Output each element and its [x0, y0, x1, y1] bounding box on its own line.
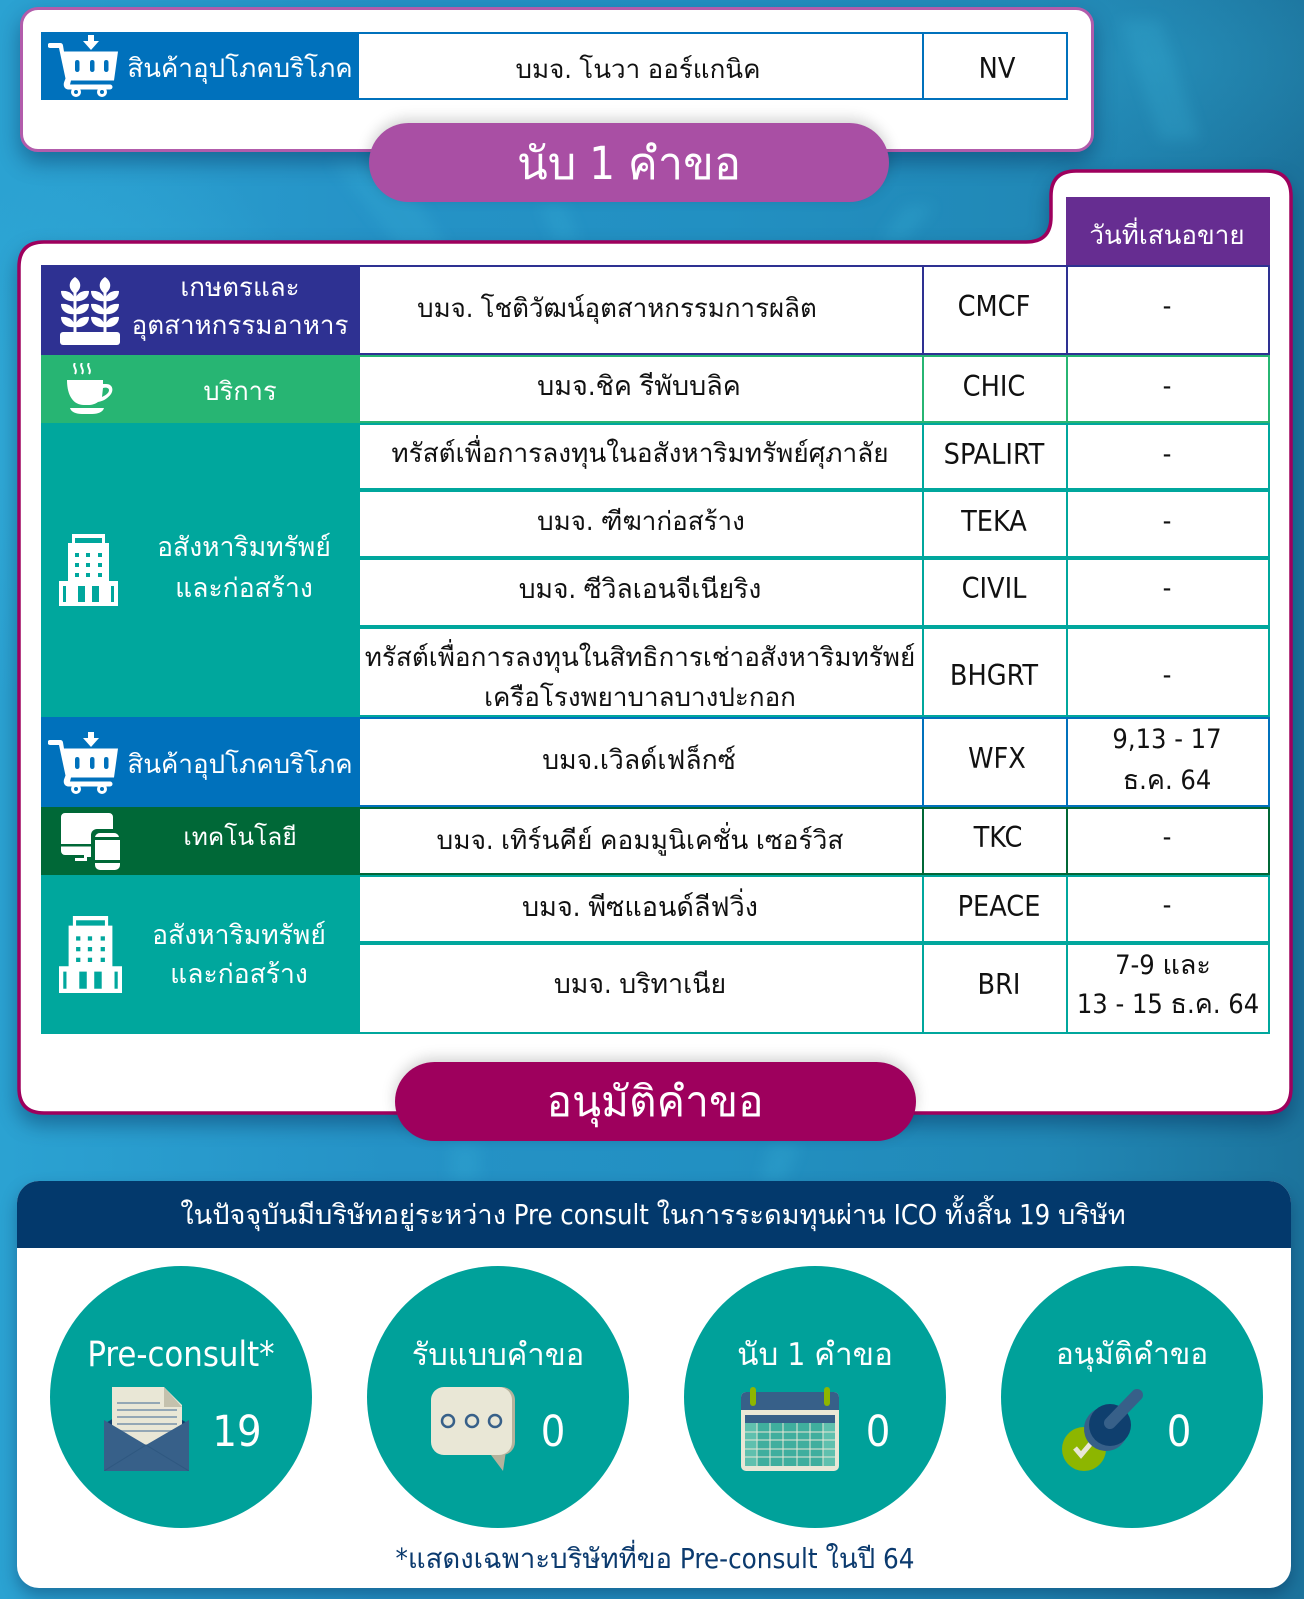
label: property and construction: [157, 532, 331, 604]
label: property and construction: [152, 920, 326, 990]
header text: วันที่เสนอขาย: [1089, 221, 1245, 251]
offering dates: [1077, 291, 1259, 1020]
tickers: WFX: [968, 742, 1026, 775]
icon: stamp: [1062, 1389, 1143, 1471]
circle: approved: อนุมัติคำขอ: [1056, 1337, 1208, 1372]
label: technology: เทคโนโลยี: [183, 822, 297, 851]
icon: speech bubble: [431, 1387, 515, 1471]
row: BHGRT: [41, 627, 1270, 717]
companies: บมจ. โชติวัฒน์อุตสาหกรรมการผลิต: [417, 294, 817, 324]
label: agriculture and food: [132, 273, 348, 341]
offering dates: -: [1163, 890, 1171, 921]
panel: filing section with tab: [6, 169, 1300, 1136]
companies: เครือโรงพยาบาลบางปะกอก: [484, 683, 796, 713]
tickers: BRI: [978, 968, 1020, 1001]
row: TKC: [41, 807, 1270, 875]
tickers: CIVIL: [962, 572, 1026, 605]
label: agriculture and food: อุตสาหกรรมอาหาร: [132, 311, 348, 341]
label: property and construction: อสังหาริมทรัพย์: [157, 532, 331, 563]
circle: first filing: 0: [866, 1407, 890, 1457]
circle: form received: 0: [541, 1407, 565, 1457]
pill text: approved: อนุมัติคำขอ: [546, 1078, 764, 1127]
companies: [365, 294, 915, 1000]
row: CHIC: [41, 355, 1270, 423]
row: WFX: [41, 717, 1270, 807]
offering dates: 13 - 15 ธ.ค. 64: [1077, 989, 1259, 1020]
icon: devices: [61, 813, 120, 870]
label: consumer goods: สินค้าอุปโภคบริโภค: [127, 54, 353, 84]
ticker: NV: NV: [979, 52, 1015, 85]
offering dates: -: [1163, 573, 1171, 604]
label: consumer goods: สินค้าอุปโภคบริโภค: [127, 750, 353, 780]
label: agriculture and food: เกษตรและ: [180, 273, 300, 303]
circle: approved: [1001, 1266, 1263, 1528]
company: NV: บมจ. โนวา ออร์แกนิค: [516, 55, 760, 85]
offering dates: -: [1163, 371, 1171, 402]
offering dates: 9,13 - 17: [1112, 724, 1222, 755]
tickers: PEACE: [958, 890, 1040, 923]
row: CIVIL: [41, 558, 1270, 627]
tickers: [944, 290, 1044, 1001]
summary heading: ในปัจจุบันมีบริษัทอยู่ระหว่าง Pre consult ในการระดมทุนผ่าน ICO ทั้งสิ้น 19 บริษัท: [180, 1200, 1126, 1231]
icon: cart: [48, 732, 118, 794]
row: SPALIRT: [41, 423, 1270, 490]
companies: บมจ.เวิลด์เฟล็กซ์: [542, 745, 736, 776]
circle: pre-consult: [50, 1266, 312, 1528]
tickers: TKC: [974, 821, 1022, 854]
companies: บมจ. พีซแอนด์ลีฟวิ่ง: [522, 892, 758, 923]
offering dates: -: [1163, 660, 1171, 691]
panel: pre consult summary: [17, 1181, 1291, 1588]
header: offering date: [1066, 197, 1270, 266]
circle: pre-consult: 19: [212, 1407, 262, 1457]
footnote: *แสดงเฉพาะบริษัทที่ขอ Pre-consult ในปี 64: [396, 1543, 914, 1575]
icon: calendar: [741, 1387, 839, 1471]
pill text: first filing: นับ 1 คำขอ: [517, 137, 741, 190]
row: TEKA: [41, 490, 1270, 558]
tickers: CHIC: [963, 370, 1025, 403]
icon: building: [59, 534, 118, 606]
circle: first filing: [684, 1266, 946, 1528]
tickers: TEKA: [961, 505, 1027, 538]
companies: บมจ. ซีวิลเอนจีเนียริง: [519, 574, 761, 605]
row: PEACE: [41, 875, 1270, 943]
offering dates: ธ.ค. 64: [1123, 765, 1211, 796]
row: BRI: [41, 943, 1270, 1034]
icon: cart: [48, 35, 118, 97]
row: CMCF: [41, 265, 1270, 355]
tickers: SPALIRT: [944, 438, 1044, 471]
companies: บมจ.ชิค รีพับบลิค: [537, 371, 741, 402]
label: property and construction: และก่อสร้าง: [170, 959, 308, 990]
offering dates: 7-9 และ: [1115, 950, 1211, 981]
pill: first filing: [369, 123, 889, 202]
panel: consumer goods filing: [20, 7, 1094, 152]
companies: บมจ. บริทาเนีย: [554, 969, 726, 1000]
label: services: บริการ: [203, 377, 277, 407]
offering dates: -: [1163, 822, 1171, 853]
label: property and construction: และก่อสร้าง: [175, 573, 313, 604]
offering dates: -: [1163, 439, 1171, 470]
circle: first filing: นับ 1 คำขอ: [737, 1337, 893, 1373]
offering dates: -: [1163, 506, 1171, 537]
companies: ทรัสต์เพื่อการลงทุนในสิทธิการเช่าอสังหาริมทรัพย์: [365, 643, 915, 673]
circle: form received: [367, 1266, 629, 1528]
tickers: BHGRT: [950, 659, 1038, 692]
circle: approved: 0: [1167, 1407, 1191, 1457]
offering dates: -: [1163, 291, 1171, 322]
companies: ทรัสต์เพื่อการลงทุนในอสังหาริมทรัพย์ศุภาลัย: [391, 439, 889, 469]
circle: pre-consult: Pre-consult*: [87, 1335, 275, 1375]
icon: building: [59, 916, 122, 993]
companies: บมจ. เทิร์นคีย์ คอมมูนิเคชั่น เซอร์วิส: [437, 826, 843, 856]
label: property and construction: อสังหาริมทรัพย์: [152, 920, 326, 951]
circle: form received: รับแบบคำขอ: [412, 1337, 584, 1373]
table row: NV: [41, 32, 1068, 100]
pill: approved: [395, 1062, 916, 1141]
icon: coffee cup: [67, 363, 112, 414]
icon: wheat: [60, 277, 120, 345]
tickers: CMCF: [958, 290, 1030, 323]
icon: envelope: [104, 1387, 189, 1471]
companies: บมจ. ฑีฆาก่อสร้าง: [537, 507, 745, 537]
